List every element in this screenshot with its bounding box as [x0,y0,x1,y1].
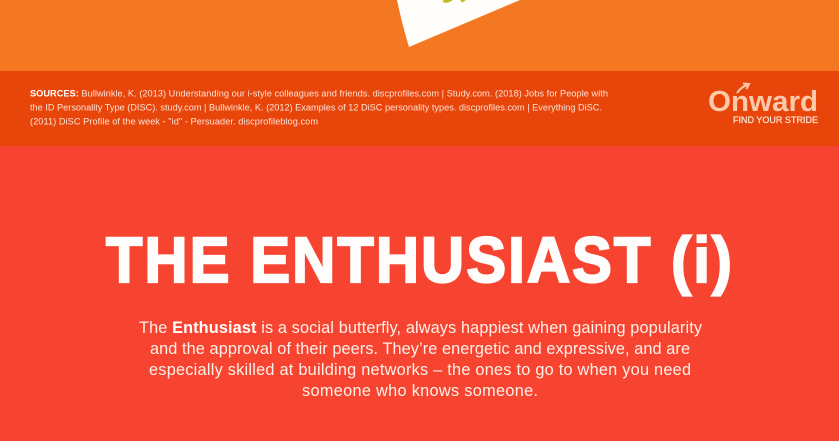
panel: red section [0,146,839,441]
description text: especially skilled at building networks – the ones to go to when you need [149,361,691,379]
logo: Onward: Onward [708,86,818,118]
description text: The Enthusiast is a social butterfly, always happiest when gaining popularity [139,319,703,337]
description text: someone who knows someone. [302,382,538,400]
sources text [30,88,608,126]
panel: orange top band [0,0,839,71]
sources text: (2011) DiSC Profile of the week - "id" - Persuader. discprofileblog.com [30,116,318,126]
sources text: SOURCES: Bullwinkle, K. (2013) Understanding our i-style colleagues and friends. discprofiles.com | Study.com. (2018) Jobs for People with [30,88,608,98]
icon: logo arrow [737,84,749,93]
logo tagline: FIND YOUR STRIDE [733,115,818,125]
title: THE ENTHUSIAST (i) [106,225,732,296]
clipped yellow card text [430,0,474,5]
description text [139,319,703,400]
panel: sources band [0,71,839,146]
description text: and the approval of their peers. They’re energetic and expressive, and are [150,340,690,358]
sources text: the ID Personality Type (DISC). study.com | Bullwinkle, K. (2012) Examples of 12 DiSC personality types. discprofiles.com | Everything DiSC. [30,102,602,112]
white rotated paper card [397,0,520,47]
